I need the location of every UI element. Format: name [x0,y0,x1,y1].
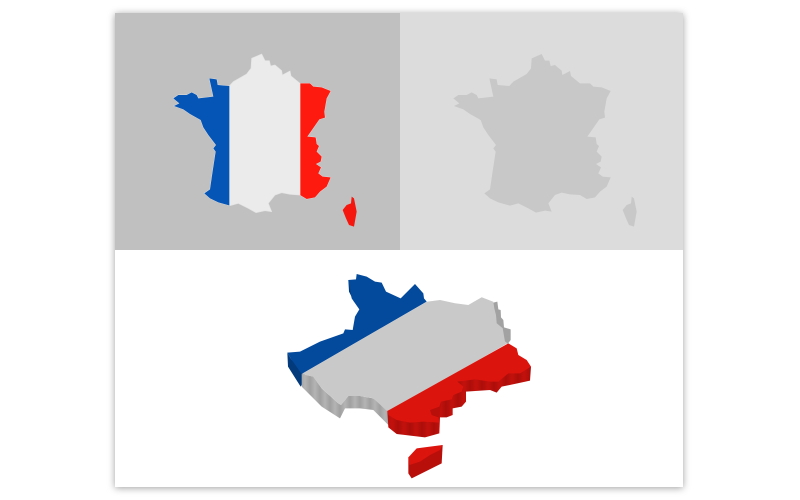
red section with extruded side [387,343,531,478]
panel: grey silhouette map [400,13,683,250]
card with drop shadow [115,13,683,487]
map: France in flag colours [163,54,357,227]
map: France silhouette [453,54,637,227]
blue section with extruded side [287,274,427,387]
grey top face [302,297,508,412]
grey extruded notches [493,302,511,344]
panel: 3D flag map [287,274,531,478]
panel: flag map on dark grey [115,13,400,250]
grey extruded side [302,374,395,425]
3D island Corsica [408,445,443,478]
